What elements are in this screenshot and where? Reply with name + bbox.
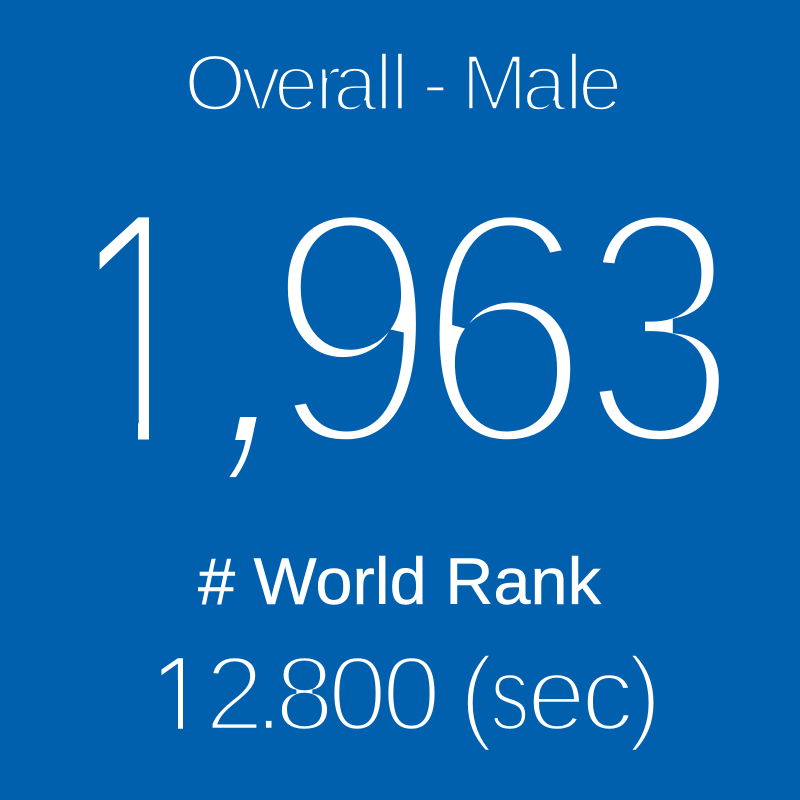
time value: 1 [150, 635, 209, 753]
time value: c [581, 635, 634, 753]
time value: s [490, 634, 530, 753]
title: Overall - Male [184, 38, 622, 127]
panel: metric card [100, 54, 719, 750]
metric label: # World Rank [198, 544, 602, 618]
time value: e [527, 635, 586, 753]
time value [161, 656, 654, 750]
time value: ( [459, 635, 494, 753]
big number: world rank value: , [195, 181, 332, 506]
big number: world rank value: 3 [581, 140, 738, 515]
time value: ) [627, 635, 662, 753]
time value: 2.800 [205, 635, 441, 753]
big number: world rank value: 1 [72, 140, 212, 515]
big number: world rank value: 6 [416, 141, 592, 516]
big number: world rank value: 9 [266, 141, 438, 516]
big number: world rank value [100, 217, 719, 478]
